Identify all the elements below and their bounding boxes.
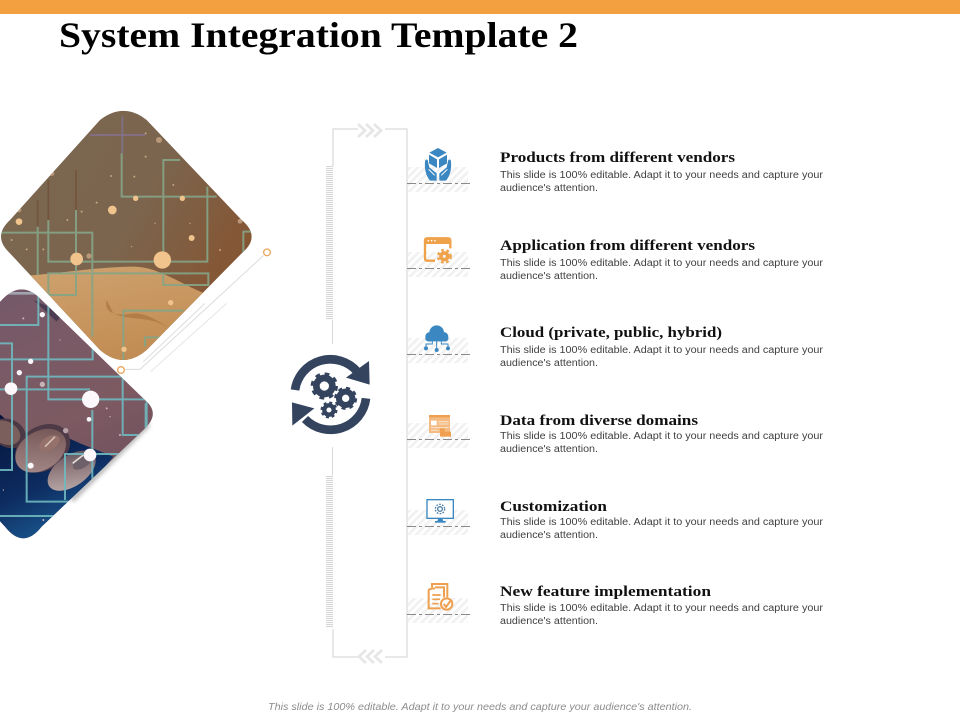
body text — [500, 517, 824, 541]
icon: cube in hands — [425, 148, 451, 181]
heading: New feature implementation — [500, 584, 711, 600]
row 4: data — [407, 413, 824, 455]
hatch column upper — [326, 166, 333, 320]
chevrons bottom — [359, 650, 382, 663]
body text: This slide is 100% editable. Adapt it to your needs and capture your — [500, 258, 824, 269]
row 6: new feature — [407, 584, 824, 627]
body text — [500, 603, 824, 627]
title: System Integration Template 2 — [59, 15, 578, 55]
icon: monitor with gear — [427, 500, 453, 523]
node: lower orange ring — [118, 367, 124, 373]
row 2: application — [407, 238, 824, 282]
hatch column lower — [326, 475, 333, 628]
icon: central gears with cycle arrows — [292, 359, 370, 430]
body text: This slide is 100% editable. Adapt it to your needs and capture your — [500, 170, 824, 181]
body text: audience's attention. — [500, 271, 598, 282]
row 3: cloud — [407, 325, 824, 369]
heading: Application from different vendors — [500, 238, 755, 254]
body text: audience's attention. — [500, 444, 598, 455]
heading: Products from different vendors — [500, 150, 735, 166]
node: upper orange ring — [264, 249, 270, 256]
body text: audience's attention. — [500, 530, 598, 541]
chevrons top — [358, 124, 381, 137]
body text: This slide is 100% editable. Adapt it to your needs and capture your — [500, 517, 824, 528]
icon: documents with check — [429, 584, 452, 610]
body text: audience's attention. — [500, 183, 598, 194]
row 1: products — [407, 148, 824, 194]
decorative connector lines with orange nodes — [118, 249, 270, 373]
heading: Cloud (private, public, hybrid) — [500, 325, 722, 341]
icon: data panels — [429, 415, 451, 437]
icon: cloud network — [424, 325, 450, 352]
body text — [500, 258, 824, 282]
body text — [500, 345, 824, 369]
bracket frame with chevrons — [326, 124, 407, 663]
heading: Customization — [500, 499, 607, 515]
image: upper diamond photo — [1, 110, 252, 360]
top accent bar — [0, 0, 960, 14]
body text — [500, 431, 824, 455]
body text: This slide is 100% editable. Adapt it to your needs and capture your — [500, 603, 824, 614]
icon: window with gear — [425, 238, 451, 263]
row 5: customization — [407, 499, 824, 541]
heading: Data from diverse domains — [500, 413, 698, 429]
body text: audience's attention. — [500, 358, 598, 369]
footer note: This slide is 100% editable. Adapt it to your needs and capture your audience's attention. — [268, 701, 692, 713]
body text — [500, 170, 824, 194]
image: lower diamond photo — [0, 289, 153, 538]
body text: This slide is 100% editable. Adapt it to your needs and capture your — [500, 431, 824, 442]
body text: audience's attention. — [500, 616, 598, 627]
body text: This slide is 100% editable. Adapt it to your needs and capture your — [500, 345, 824, 356]
